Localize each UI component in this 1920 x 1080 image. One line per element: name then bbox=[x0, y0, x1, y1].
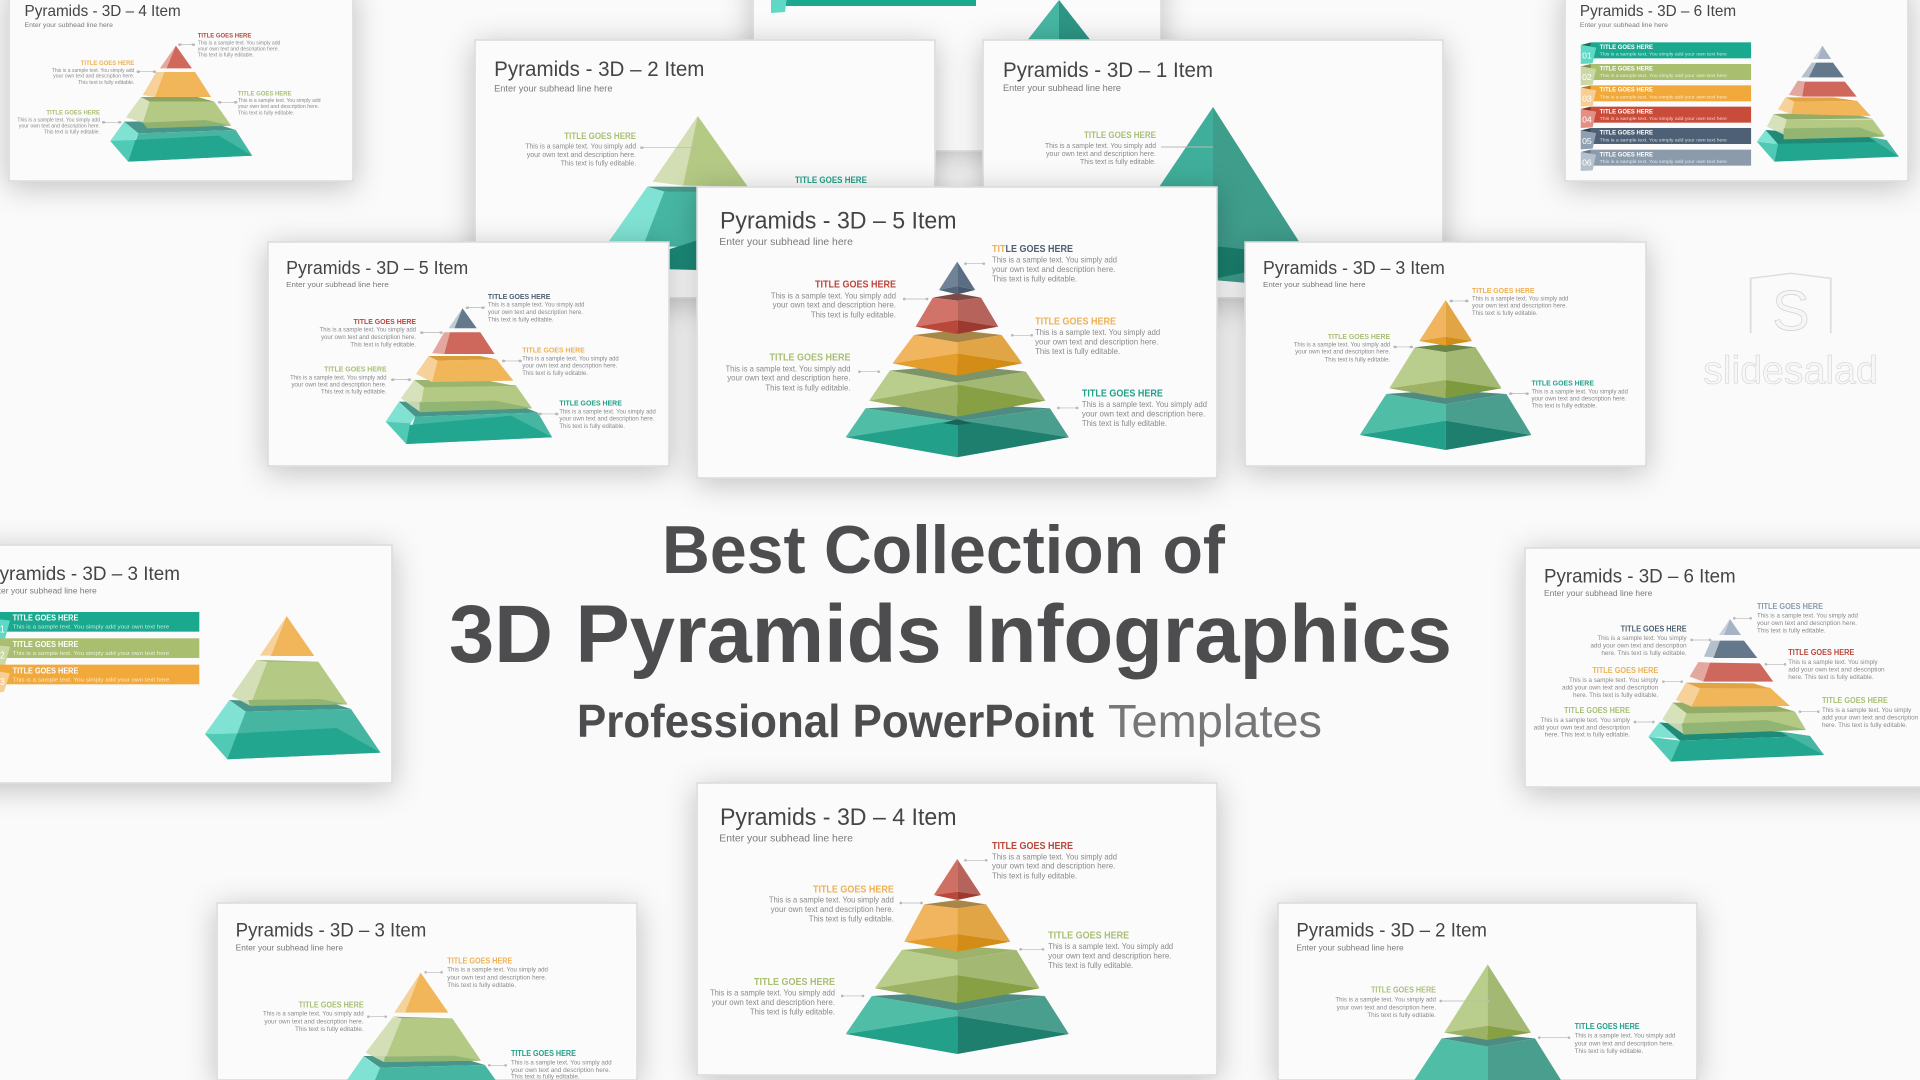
slide: 4 item, top left bbox=[9, 0, 353, 181]
label: green right bbox=[1021, 931, 1173, 970]
heading line 3 light word: Templates bbox=[1108, 695, 1322, 747]
label: orange: here. This text is fully editable. bbox=[1573, 692, 1659, 699]
label: This is a sample text. You simply add bbox=[1045, 142, 1156, 150]
label: green left: your own text and description here. bbox=[712, 998, 835, 1007]
ribbon 05 bbox=[1581, 128, 1751, 149]
slide title: Pyramids - 3D – 4 Item bbox=[720, 804, 957, 831]
label: green right: your own text and description here. bbox=[238, 104, 319, 110]
label: green left: This is a sample text. You simply add bbox=[17, 117, 100, 123]
label: teal bbox=[1511, 379, 1628, 409]
label: teal: This is a sample text. You simply add bbox=[1082, 400, 1207, 409]
label: slate: This text is fully editable. bbox=[992, 274, 1077, 283]
label: green right: your own text and description here. bbox=[1048, 951, 1171, 960]
label: slate: This is a sample text. You simply bbox=[1597, 635, 1687, 642]
label: teal: TITLE GOES HERE bbox=[1531, 379, 1594, 387]
label: teal bbox=[540, 399, 656, 430]
label: green: TITLE GOES HERE bbox=[564, 132, 636, 142]
label: green right: This is a sample text. You simply add bbox=[1048, 942, 1173, 951]
ribbon 02: 02 bbox=[1582, 73, 1592, 83]
label: green right bbox=[220, 89, 321, 116]
ribbon 06: 06 bbox=[1582, 159, 1592, 168]
ribbon 02 bbox=[0, 638, 199, 666]
label: your own text and description here. bbox=[1046, 150, 1156, 158]
pyramid bbox=[205, 616, 381, 759]
label: red: your own text and description here. bbox=[198, 46, 279, 52]
label: red: This is a sample text. You simply add bbox=[198, 40, 281, 46]
label: red: This text is fully editable. bbox=[811, 310, 896, 319]
label: orange: your own text and description here. bbox=[1035, 337, 1158, 346]
label: green right: TITLE GOES HERE bbox=[1048, 931, 1129, 942]
pyramid bbox=[110, 46, 252, 162]
ribbon 03: This is a sample text. You simply add your own text here bbox=[1600, 95, 1727, 100]
subhead: Enter your subhead line here bbox=[25, 21, 113, 29]
label: teal: TITLE GOES HERE bbox=[559, 399, 622, 407]
label: teal: This text is fully editable. bbox=[1575, 1048, 1643, 1055]
label: orange bbox=[1012, 316, 1160, 356]
number tab bbox=[771, 0, 787, 13]
slide: 5 item, left bbox=[268, 242, 669, 466]
label: orange bbox=[769, 884, 921, 924]
label: green: your own text and description here. bbox=[264, 1018, 364, 1025]
label: slate: your own text and description here. bbox=[992, 265, 1115, 274]
label: green right: This is a sample text. You simply bbox=[1822, 707, 1912, 714]
slide title: Pyramids - 3D – 5 Item bbox=[286, 257, 468, 278]
label: orange: This text is fully editable. bbox=[78, 80, 135, 86]
subhead: Enter your subhead line here bbox=[1296, 944, 1404, 953]
label: green: your own text and description here. bbox=[527, 151, 636, 159]
label: green bbox=[1294, 332, 1411, 363]
label: green right: This is a sample text. You simply add bbox=[238, 98, 321, 104]
label: red: This is a sample text. You simply add bbox=[320, 326, 416, 333]
label: teal: TITLE GOES HERE bbox=[795, 176, 867, 186]
ribbon 01: This is a sample text. You simply add your own text here bbox=[1600, 52, 1727, 57]
slide title: Pyramids - 3D – 3 Item bbox=[236, 921, 426, 942]
label: teal: This is a sample text. You simply add bbox=[511, 1059, 612, 1066]
label: red bbox=[1766, 648, 1885, 681]
pyramid bbox=[347, 973, 496, 1080]
label: red: your own text and description here. bbox=[321, 333, 416, 341]
label: slate: TITLE GOES HERE bbox=[992, 244, 1073, 255]
label: green left: This is a sample text. You simply bbox=[1541, 717, 1631, 724]
label: green bbox=[525, 132, 694, 167]
label: green right: here. This text is fully editable. bbox=[1822, 722, 1907, 729]
label: orange: This text is fully editable. bbox=[1472, 309, 1538, 317]
label: orange bbox=[52, 59, 154, 86]
label: grey bbox=[1734, 602, 1858, 635]
label: green left: your own text and description here. bbox=[19, 123, 100, 129]
label: green: This is a sample text. You simply add bbox=[1294, 341, 1390, 348]
label: teal: your own text and description here. bbox=[1082, 409, 1205, 418]
label: teal: This is a sample text. You simply add bbox=[559, 407, 656, 415]
label: green left bbox=[1534, 706, 1653, 739]
label: slate: your own text and description here. bbox=[488, 308, 583, 316]
label: red bbox=[771, 280, 927, 319]
label: green: This text is fully editable. bbox=[1325, 355, 1390, 363]
label: orange: This is a sample text. You simply add bbox=[522, 354, 619, 362]
label: This text is fully editable. bbox=[1080, 158, 1156, 166]
ribbon 04: 04 bbox=[1582, 116, 1592, 125]
heading line 1: Best Collection of bbox=[662, 512, 1225, 588]
label: orange: TITLE GOES HERE bbox=[81, 59, 134, 67]
label: green: This text is fully editable. bbox=[1367, 1012, 1436, 1019]
label: green bbox=[290, 365, 409, 395]
label: orange: This is a sample text. You simply bbox=[1569, 677, 1659, 684]
ribbon 05: TITLE GOES HERE bbox=[1600, 129, 1653, 136]
ribbon bar bbox=[771, 0, 976, 6]
label: red: TITLE GOES HERE bbox=[198, 32, 251, 39]
label: green right: TITLE GOES HERE bbox=[238, 89, 291, 97]
ribbon 03: TITLE GOES HERE bbox=[13, 666, 79, 675]
label: TITLE GOES HERE bbox=[1084, 130, 1156, 140]
ribbon 03 bbox=[1581, 85, 1751, 107]
ribbon 01: 01 bbox=[1582, 52, 1592, 61]
label: green bbox=[725, 353, 879, 392]
subhead: Enter your subhead line here bbox=[286, 280, 389, 289]
slide title: Pyramids - 3D – 2 Item bbox=[1296, 921, 1487, 942]
label: green left: This is a sample text. You simply add bbox=[710, 989, 835, 998]
label: red: TITLE GOES HERE bbox=[992, 841, 1073, 852]
label bbox=[1045, 130, 1213, 166]
ribbon 03: 03 bbox=[1582, 94, 1592, 104]
label: teal: TITLE GOES HERE bbox=[511, 1049, 576, 1058]
ribbon 03: TITLE GOES HERE bbox=[1600, 86, 1653, 93]
slide: 1 item, behind centre bbox=[983, 40, 1443, 298]
pyramid bbox=[598, 116, 759, 272]
slide: top centre, mostly hidden bbox=[753, 0, 1161, 151]
heading: main title block bbox=[449, 512, 1452, 747]
slide: 2 item, bottom right bbox=[1278, 903, 1697, 1080]
heading line 2: 3D Pyramids Infographics bbox=[449, 589, 1452, 680]
label: green: This text is fully editable. bbox=[561, 159, 636, 167]
label: slate: TITLE GOES HERE bbox=[488, 292, 550, 301]
label: orange: your own text and description here. bbox=[1472, 302, 1567, 309]
label: teal bbox=[1539, 1022, 1676, 1055]
ribbon 06: This is a sample text. You simply add your own text here bbox=[1600, 160, 1727, 165]
label: green left: This text is fully editable. bbox=[44, 129, 100, 135]
label: green: This text is fully editable. bbox=[765, 383, 850, 392]
label: green: TITLE GOES HERE bbox=[1371, 986, 1436, 995]
label: red: here. This text is fully editable. bbox=[1788, 674, 1874, 681]
label: orange: add your own text and description bbox=[1562, 684, 1659, 691]
label: orange: TITLE GOES HERE bbox=[813, 884, 894, 895]
label: red bbox=[320, 317, 441, 348]
label: slate: This is a sample text. You simply add bbox=[488, 301, 584, 308]
ribbon 02: TITLE GOES HERE bbox=[13, 640, 79, 649]
subhead: Enter your subhead line here bbox=[719, 834, 853, 845]
pyramid bbox=[1360, 300, 1531, 450]
label: green bbox=[1335, 986, 1488, 1019]
ribbon 02: TITLE GOES HERE bbox=[1600, 64, 1653, 72]
subhead: Enter your subhead line here bbox=[1263, 280, 1366, 289]
label: teal: your own text and description here. bbox=[511, 1067, 610, 1074]
label: red: TITLE GOES HERE bbox=[354, 317, 416, 326]
label: red: add your own text and description bbox=[1788, 666, 1885, 673]
label: teal: This text is fully editable. bbox=[559, 422, 625, 430]
label: green bbox=[263, 1000, 386, 1033]
label: green: This is a sample text. You simply add bbox=[290, 373, 387, 381]
ribbon 06: TITLE GOES HERE bbox=[1600, 150, 1653, 158]
label: green: This is a sample text. You simply add bbox=[525, 143, 636, 150]
label: slate: This is a sample text. You simply add bbox=[992, 256, 1117, 265]
slide: 3 item, right bbox=[1245, 242, 1646, 466]
pyramid bbox=[846, 859, 1069, 1054]
label: grey: your own text and description here. bbox=[1757, 620, 1857, 627]
label: teal: your own text and description here. bbox=[559, 415, 654, 422]
ribbon 05: 05 bbox=[1582, 137, 1592, 147]
label: red: This is a sample text. You simply add bbox=[992, 852, 1117, 861]
slide: 5 item, centre bbox=[697, 187, 1217, 478]
label: green: your own text and description here. bbox=[291, 380, 387, 388]
label: green: your own text and description here. bbox=[727, 374, 850, 383]
label: green: This is a sample text. You simply add bbox=[1335, 996, 1436, 1003]
slide title: Pyramids - 3D – 6 Item bbox=[1580, 1, 1736, 19]
label: green left: here. This text is fully editable. bbox=[1545, 732, 1630, 739]
label: orange bbox=[1562, 666, 1682, 699]
ribbon 03: This is a sample text. You simply add your own text here bbox=[13, 677, 169, 683]
label: green right bbox=[1800, 696, 1919, 729]
label: orange bbox=[504, 346, 619, 377]
label: green: This is a sample text. You simply add bbox=[263, 1011, 364, 1018]
label: teal: This text is fully editable. bbox=[1082, 419, 1167, 428]
slide: 6 item ribbon list, top right bbox=[1565, 0, 1908, 181]
slide title: Pyramids - 3D – 1 Item bbox=[1003, 59, 1213, 82]
ribbon 03 bbox=[0, 665, 199, 692]
label: red: This is a sample text. You simply add bbox=[771, 291, 896, 300]
label: green: TITLE GOES HERE bbox=[324, 365, 387, 373]
label: red bbox=[180, 32, 281, 58]
label: green: TITLE GOES HERE bbox=[770, 353, 851, 364]
label: orange: This text is fully editable. bbox=[1035, 347, 1120, 356]
label: teal: TITLE GOES HERE bbox=[1575, 1022, 1640, 1031]
label: green: your own text and description here. bbox=[1295, 348, 1390, 355]
label: red: TITLE GOES HERE bbox=[1788, 648, 1855, 657]
ribbon 04: This is a sample text. You simply add your own text here bbox=[1600, 117, 1727, 122]
label: teal: your own text and description here. bbox=[1575, 1040, 1674, 1047]
slide: 4 item, bottom centre bbox=[697, 783, 1217, 1075]
ribbon 04: TITLE GOES HERE bbox=[1600, 107, 1653, 115]
label: green left bbox=[710, 977, 863, 1017]
slide title: Pyramids - 3D – 4 Item bbox=[25, 2, 181, 20]
pyramid bbox=[1648, 619, 1824, 762]
label: teal: your own text and description here. bbox=[1531, 394, 1627, 402]
ribbon 02: This is a sample text. You simply add your own text here bbox=[1600, 74, 1727, 79]
pyramid bbox=[386, 308, 552, 444]
label: red: This text is fully editable. bbox=[992, 871, 1077, 880]
label: green left: add your own text and description bbox=[1534, 724, 1630, 731]
slide: 3 item ribbon list, left bbox=[0, 545, 392, 783]
logo: slidesalad watermark bbox=[1703, 273, 1878, 392]
label: orange bbox=[426, 956, 548, 989]
label: teal: This is a sample text. You simply add bbox=[1531, 387, 1628, 395]
label: teal: TITLE GOES HERE bbox=[1082, 388, 1163, 399]
slide: 3 item, bottom left bbox=[217, 903, 637, 1080]
pyramid bbox=[1120, 107, 1330, 290]
ribbon 04 bbox=[1581, 107, 1751, 128]
label: green: your own text and description here. bbox=[1337, 1004, 1436, 1011]
pyramid bbox=[846, 262, 1069, 457]
label: teal bbox=[1059, 388, 1207, 428]
label: green: This is a sample text. You simply add bbox=[725, 364, 850, 373]
label: green right: This text is fully editable. bbox=[238, 110, 294, 116]
label: red: your own text and description here. bbox=[992, 862, 1115, 871]
label: green left: TITLE GOES HERE bbox=[46, 109, 100, 116]
slide: 2 item, behind centre bbox=[475, 40, 935, 298]
label: orange: This is a sample text. You simply add bbox=[1472, 295, 1568, 302]
label: green right: TITLE GOES HERE bbox=[1822, 696, 1888, 705]
label: green: This text is fully editable. bbox=[295, 1026, 364, 1033]
label: slate bbox=[966, 244, 1117, 283]
label: green: TITLE GOES HERE bbox=[1328, 332, 1390, 341]
label: green: This text is fully editable. bbox=[321, 388, 387, 395]
label: orange: TITLE GOES HERE bbox=[522, 346, 585, 354]
heading line 3: Professional PowerPoint bbox=[577, 695, 1094, 747]
label: orange: your own text and description here. bbox=[522, 362, 617, 369]
label: green right: add your own text and description bbox=[1822, 714, 1919, 721]
label: teal bbox=[489, 1049, 612, 1080]
label: slate: TITLE GOES HERE bbox=[1621, 624, 1687, 633]
label: orange: This is a sample text. You simply add bbox=[52, 68, 135, 74]
ribbon 01: This is a sample text. You simply add your own text here bbox=[13, 625, 169, 631]
label: red bbox=[966, 841, 1117, 880]
label: orange: This is a sample text. You simply add bbox=[447, 967, 548, 974]
slide: 6 item, right bbox=[1525, 548, 1920, 787]
label: green: TITLE GOES HERE bbox=[299, 1000, 364, 1009]
small pyramid apex bbox=[1026, 0, 1092, 42]
label: orange: your own text and description here. bbox=[771, 905, 894, 914]
label: slate bbox=[467, 292, 584, 323]
logo: slidesalad watermark: S bbox=[1772, 280, 1810, 343]
label: orange: your own text and description here. bbox=[53, 73, 135, 79]
label: orange: your own text and description here. bbox=[447, 974, 547, 981]
ribbon 02 bbox=[1581, 64, 1751, 85]
label: green left: TITLE GOES HERE bbox=[1564, 706, 1630, 715]
label: orange bbox=[1451, 286, 1568, 317]
subhead: Enter your subhead line here bbox=[1544, 589, 1653, 598]
subhead: Enter your subhead line here bbox=[1003, 83, 1121, 93]
label: teal: This text is fully editable. bbox=[1531, 402, 1597, 409]
label: green right: This text is fully editable. bbox=[1048, 961, 1133, 970]
label: orange: This is a sample text. You simply add bbox=[1035, 328, 1160, 337]
slide title: Pyramids - 3D – 5 Item bbox=[720, 208, 957, 234]
slide title: Pyramids - 3D – 6 Item bbox=[1544, 566, 1736, 588]
label: red: This text is fully editable. bbox=[198, 52, 254, 58]
label: red: This is a sample text. You simply bbox=[1788, 659, 1878, 666]
ribbon 01: TITLE GOES HERE bbox=[1600, 43, 1653, 51]
ribbon 06 bbox=[1581, 150, 1751, 171]
label: orange: TITLE GOES HERE bbox=[447, 956, 513, 965]
pyramid bbox=[1414, 964, 1561, 1080]
ribbon 05: This is a sample text. You simply add your own text here bbox=[1600, 138, 1727, 143]
label: green left: TITLE GOES HERE bbox=[754, 977, 835, 988]
label: orange: TITLE GOES HERE bbox=[1035, 316, 1116, 327]
label: red: TITLE GOES HERE bbox=[815, 280, 896, 291]
ribbon 02: This is a sample text. You simply add your own text here bbox=[13, 651, 169, 657]
label: grey: This text is fully editable. bbox=[1757, 628, 1826, 635]
label: orange: This text is fully editable. bbox=[522, 369, 588, 377]
slide title: Pyramids - 3D – 3 Item bbox=[1263, 257, 1445, 278]
label: teal: This is a sample text. You simply add bbox=[1575, 1033, 1676, 1040]
ribbon 01: TITLE GOES HERE bbox=[13, 614, 79, 623]
subhead: Enter your subhead line here bbox=[1580, 21, 1668, 29]
label: slate: This text is fully editable. bbox=[488, 315, 554, 323]
label: slate bbox=[1590, 624, 1710, 657]
label: slate: here. This text is fully editable. bbox=[1601, 650, 1687, 657]
label: green left: This text is fully editable. bbox=[750, 1008, 835, 1017]
label: green left bbox=[17, 109, 120, 135]
ribbon 01 bbox=[1581, 42, 1751, 64]
label: red: your own text and description here. bbox=[773, 301, 896, 310]
subhead: Enter your subhead line here bbox=[236, 944, 344, 953]
slide title: Pyramids - 3D – 2 Item bbox=[494, 57, 704, 81]
label: red: This text is fully editable. bbox=[350, 340, 416, 348]
label: orange: This text is fully editable. bbox=[809, 915, 894, 924]
label: grey: This is a sample text. You simply add bbox=[1757, 612, 1858, 619]
ribbon 01 bbox=[0, 612, 199, 640]
pyramid bbox=[1757, 46, 1899, 162]
subhead: Enter your subhead line here bbox=[494, 85, 613, 94]
label: orange: TITLE GOES HERE bbox=[1592, 666, 1659, 675]
label: orange: TITLE GOES HERE bbox=[1472, 286, 1535, 295]
label: slate: add your own text and description bbox=[1590, 642, 1687, 649]
label: orange: This text is fully editable. bbox=[447, 982, 516, 989]
subhead: Enter your subhead line here bbox=[719, 237, 853, 248]
label: grey: TITLE GOES HERE bbox=[1757, 602, 1823, 611]
label: orange: This is a sample text. You simply add bbox=[769, 896, 894, 905]
